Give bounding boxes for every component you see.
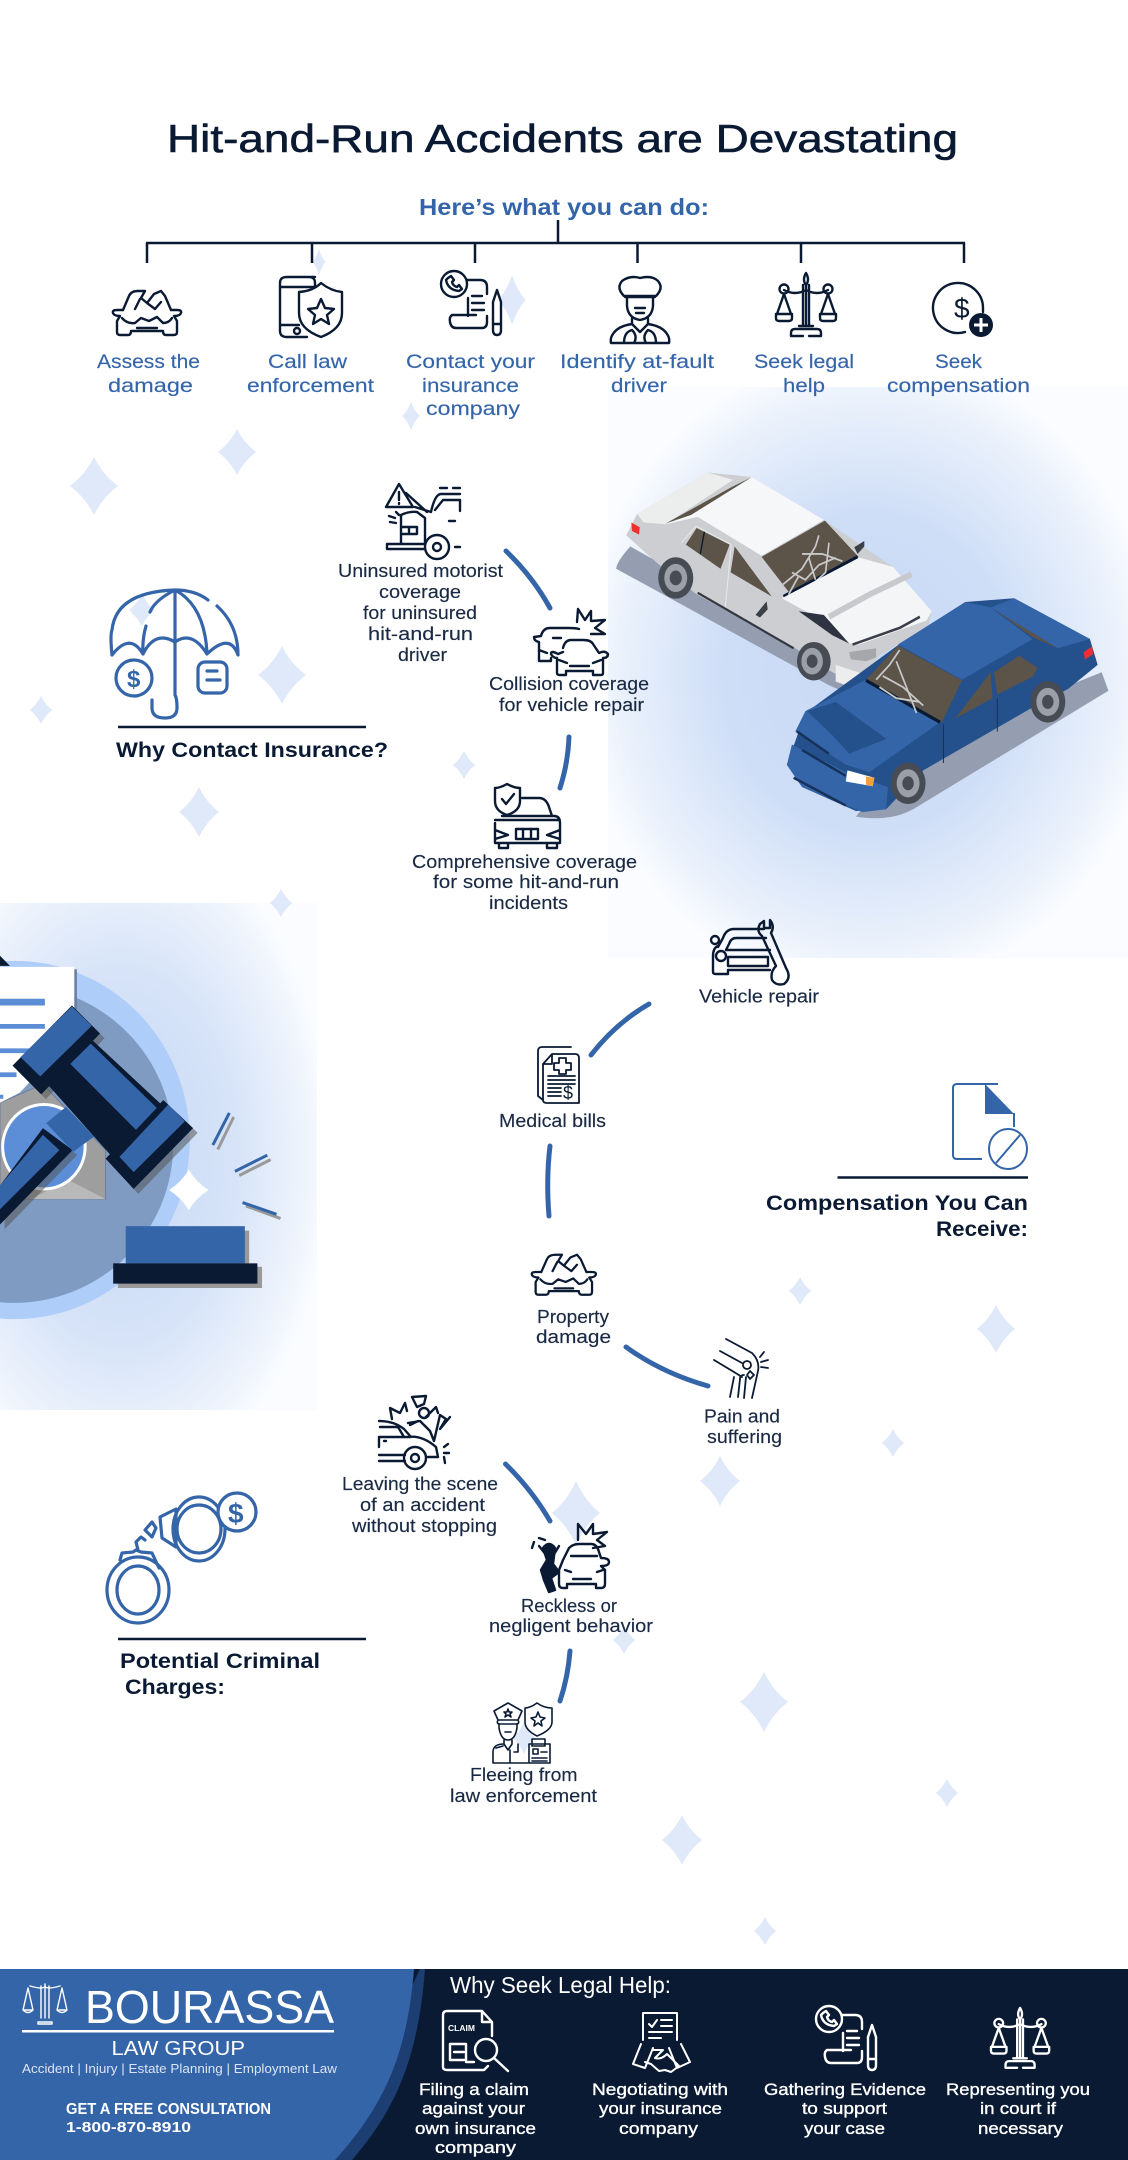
item: comprehensive coverage: for some hit-and-run (433, 871, 619, 892)
item: leaving the scene: of an accident (360, 1494, 485, 1515)
logo: Bourassa Law Group: Accident | Injury | Estate Planning | Employment Law (22, 2062, 338, 2076)
item: pain and suffering (704, 1339, 782, 1447)
step: seek compensation: $ (954, 293, 970, 324)
blue car (787, 598, 1108, 818)
item: medical bills: $ (563, 1083, 573, 1103)
step: call law enforcement: Call law (268, 351, 348, 373)
reason: representing you in court: necessary (978, 2119, 1064, 2138)
reason: filing a claim: own insurance (415, 2119, 536, 2138)
item: reckless or negligent behavior (489, 1524, 653, 1636)
item: comprehensive coverage: incidents (489, 892, 568, 913)
logo: Bourassa Law Group: BOURASSA (85, 1981, 334, 2033)
item: comprehensive coverage: Comprehensive coverage (412, 851, 637, 872)
item: fleeing from law enforcement: Fleeing from (470, 1764, 578, 1785)
step: contact your insurance company: insurance (422, 375, 519, 397)
step: identify at-fault driver: driver (611, 375, 668, 397)
section: compensation you can receive (766, 1084, 1028, 1241)
tree connector (146, 220, 965, 263)
item: reckless or negligent behavior: negligent behavior (489, 1615, 653, 1636)
icon: document with prohibition sign (953, 1084, 1027, 1169)
logo: Bourassa Law Group: LAW GROUP (112, 2038, 245, 2060)
reason: negotiating with your insurance company: company (619, 2119, 699, 2138)
divider line (118, 1638, 366, 1640)
step: assess the damage: Assess the (97, 351, 200, 373)
step: contact your insurance company: Contact your (406, 351, 536, 373)
step: assess the damage (97, 291, 200, 397)
heading: Why Contact Insurance? (116, 739, 388, 762)
block (113, 1226, 262, 1288)
illustration: gavel (0, 956, 280, 1319)
item: comprehensive coverage (412, 784, 637, 913)
item: uninsured motorist coverage (338, 484, 503, 665)
gavel shadow (5, 1010, 198, 1229)
item: medical bills (499, 1047, 606, 1131)
item: fleeing from law enforcement: law enforcement (450, 1785, 597, 1806)
arc connector (560, 737, 569, 788)
white car (616, 472, 932, 693)
reason: gathering evidence: to support (802, 2099, 887, 2118)
icon: umbrella (111, 590, 238, 718)
heading (120, 1650, 320, 1699)
item: collision coverage: Collision coverage (489, 673, 649, 694)
step: call law enforcement (247, 277, 375, 397)
item: uninsured motorist coverage: for uninsured (363, 602, 477, 623)
step: seek legal help: help (783, 375, 825, 397)
reason: negotiating with your insurance company: your insurance (599, 2099, 722, 2118)
heading: Potential Criminal (120, 1650, 320, 1673)
icon: umbrella: $ (127, 666, 141, 693)
step: contact your insurance company: company (426, 398, 520, 420)
heading (766, 1192, 1028, 1241)
reason: representing you in court: Representing you (946, 2080, 1090, 2099)
reason: negotiating with your insurance company: Negotiating with (592, 2080, 728, 2099)
footer band (0, 1969, 1128, 2160)
step: contact your insurance company (406, 271, 536, 420)
item: fleeing from law enforcement (450, 1703, 597, 1806)
item: uninsured motorist coverage: hit-and-run (368, 623, 473, 644)
icon: handcuffs (107, 1493, 256, 1623)
decorative sparkles (30, 249, 1015, 1945)
item: leaving the scene (342, 1396, 498, 1536)
reason: filing a claim: company (435, 2138, 517, 2157)
illustration: crashed white and blue cars (616, 472, 1108, 818)
item: vehicle repair: Vehicle repair (699, 986, 819, 1006)
call to action (66, 2101, 271, 2136)
step: identify at-fault driver (560, 277, 715, 397)
item: uninsured motorist coverage: driver (398, 644, 447, 665)
item: uninsured motorist coverage: coverage (379, 581, 461, 602)
item: reckless or negligent behavior: Reckless or (521, 1595, 617, 1616)
reason: negotiating with your insurance company (592, 2013, 728, 2138)
call to action: GET A FREE CONSULTATION (66, 2101, 271, 2118)
item: leaving the scene: without stopping (351, 1515, 497, 1536)
icon: logo scale (23, 1984, 67, 2024)
reason: gathering evidence: your case (804, 2119, 885, 2138)
item: collision coverage (489, 609, 649, 715)
reason: filing a claim: against your (422, 2099, 525, 2118)
step: call law enforcement: enforcement (247, 375, 375, 397)
arc connector (560, 1651, 570, 1701)
arc connector (506, 1464, 550, 1521)
item: property damage: Property (537, 1306, 610, 1327)
heading: here's what you can do: Here’s what you can do: (419, 194, 709, 220)
step: assess the damage: damage (108, 375, 193, 397)
item: collision coverage: for vehicle repair (499, 694, 644, 715)
call to action: 1-800-870-8910 (66, 2119, 191, 2136)
step: seek legal help (754, 273, 854, 397)
step: seek compensation: Seek (935, 351, 982, 373)
arc connector (591, 1004, 649, 1055)
reason: filing a claim (415, 2011, 536, 2157)
arc connector (548, 1146, 550, 1216)
step: seek compensation (887, 283, 1030, 397)
item: vehicle repair (699, 920, 819, 1006)
item: uninsured motorist coverage: Uninsured motorist (338, 560, 503, 581)
item: leaving the scene: Leaving the scene (342, 1473, 498, 1494)
reason: gathering evidence (764, 2006, 926, 2138)
divider line (838, 1176, 1028, 1179)
reason: representing you in court (946, 2008, 1090, 2138)
panel: crash illustration background (608, 387, 1128, 958)
reason: filing a claim: Filing a claim (419, 2080, 529, 2099)
icon: handcuffs: $ (228, 1498, 244, 1529)
heading: Charges: (125, 1676, 225, 1699)
arc connector (506, 551, 550, 608)
step: seek compensation: compensation (887, 375, 1030, 397)
item: pain and suffering: suffering (707, 1426, 782, 1447)
item: property damage (532, 1255, 611, 1347)
reason: representing you in court: in court if (980, 2099, 1056, 2118)
step: identify at-fault driver: Identify at-fault (560, 351, 715, 373)
item: medical bills: Medical bills (499, 1110, 606, 1131)
panel: gavel illustration background (0, 903, 317, 1410)
heading: Compensation You Can (766, 1192, 1028, 1215)
arc connector (626, 1347, 708, 1386)
title: Hit-and-Run Accidents are Devastating (167, 118, 958, 161)
heading: Receive: (936, 1218, 1028, 1241)
step: seek legal help: Seek legal (754, 351, 854, 373)
divider line (118, 726, 366, 728)
section: why contact insurance (111, 590, 388, 762)
heading: why seek legal help: Why Seek Legal Help: (450, 1972, 671, 1998)
logo: Bourassa Law Group (22, 1981, 338, 2076)
reason: filing a claim: CLAIM (448, 2023, 475, 2033)
reason: gathering evidence: Gathering Evidence (764, 2080, 926, 2099)
item: pain and suffering: Pain and (704, 1406, 780, 1426)
item: property damage: damage (536, 1326, 611, 1347)
section: potential criminal charges (107, 1493, 366, 1699)
